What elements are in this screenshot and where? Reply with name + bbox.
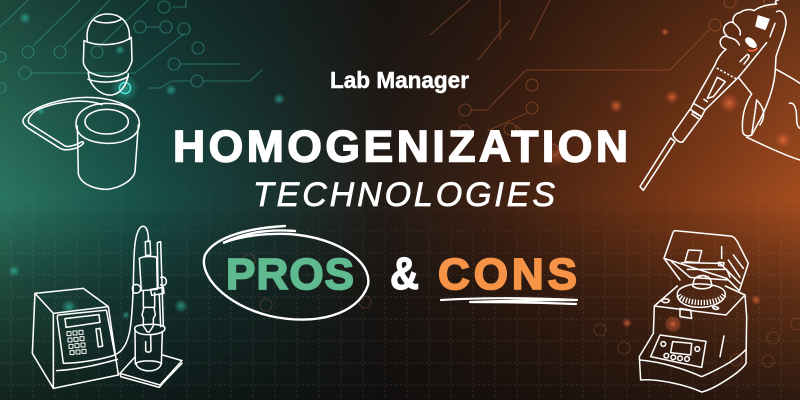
icon: benchtop bead mill homogenizer	[639, 231, 748, 392]
orange circuit traces	[430, 0, 776, 156]
hand-drawn circle around Pros	[204, 226, 368, 320]
icon: high-pressure homogenizer unit	[32, 226, 182, 388]
title: Homogenization: HOMOGENIZATION	[173, 122, 628, 172]
subtitle: Technologies: TECHNOLOGIES	[253, 176, 555, 214]
logo: Lab Manager: Lab Manager	[330, 67, 469, 93]
bright node	[111, 74, 139, 102]
glowing particles	[8, 12, 791, 333]
icon: handheld homogenizer in hand	[640, 0, 800, 190]
heading: Cons: CONS	[438, 250, 577, 299]
teal circuit traces	[0, 0, 262, 93]
lower circuit nodes	[243, 254, 800, 367]
icon: homogenizer cap and cup	[23, 14, 139, 189]
heading: Pros: PROS	[226, 250, 354, 299]
hand-drawn underline under Cons	[441, 298, 577, 304]
ampersand: &	[390, 248, 419, 299]
